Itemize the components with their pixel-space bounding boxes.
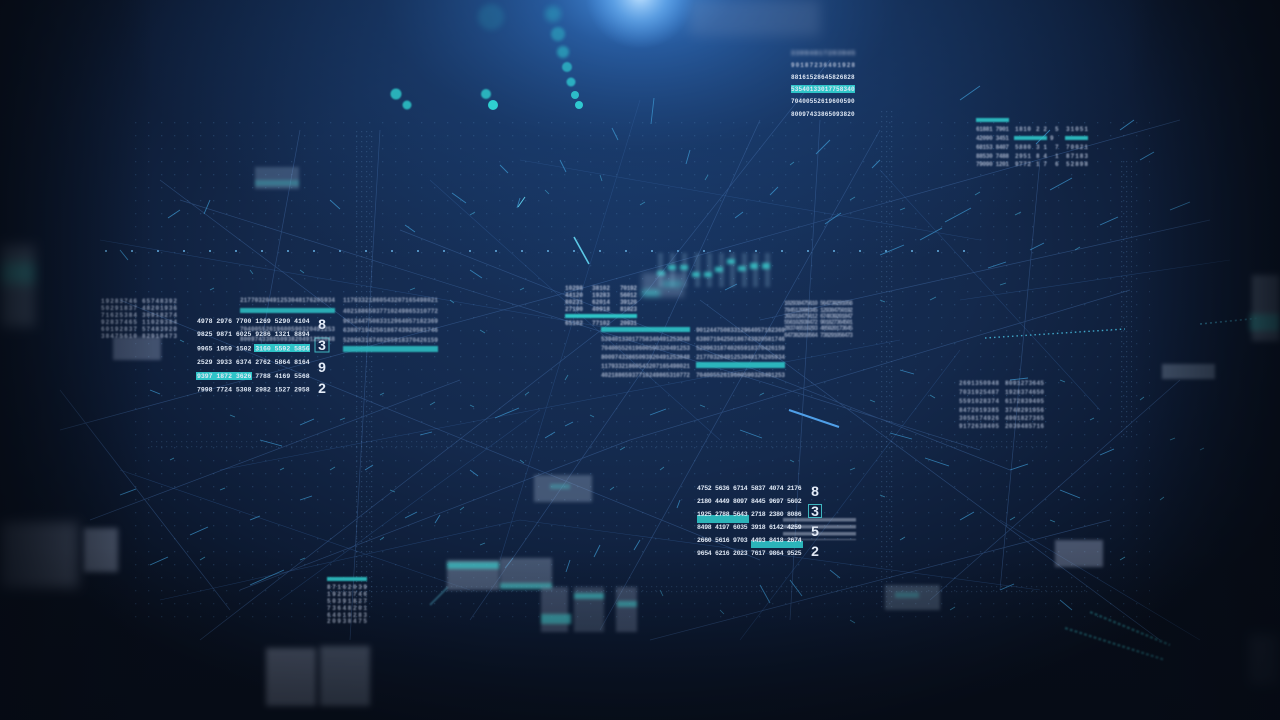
data block: lower list: 73648201 <box>327 605 367 612</box>
blurred patch near chart <box>642 273 684 297</box>
data block: small center columns: 39120 <box>620 299 637 306</box>
data lines: left upper block: 63807194250186743920581746 <box>343 327 438 334</box>
data lines: left upper block: 21770320491253048176205934 <box>240 297 335 304</box>
data block: center right blurred columns: 129384750192 <box>820 307 853 314</box>
teal light dots top <box>390 88 498 110</box>
blurred panel: right edge teal <box>1250 275 1280 341</box>
large digits <box>315 316 329 396</box>
dashed teal beams on right <box>985 318 1260 660</box>
number rows: 9654 6216 2023 7617 9864 9525 <box>697 550 802 557</box>
data block: left blurred columns: 38475610 <box>101 333 137 340</box>
data block: right middle blurred: 6172839405 <box>1005 398 1044 405</box>
data lines: left upper block: 52096318740265918370426159 <box>343 337 438 344</box>
data table: top right grid: 31051 <box>1066 126 1088 133</box>
number rows: 1925 2788 5643 2718 2380 8086 <box>697 511 802 518</box>
tiny particle dashes <box>170 162 1204 623</box>
dot grid field <box>130 110 1150 620</box>
highlight bars <box>697 515 803 548</box>
data block: small center columns: 19283 <box>592 292 610 299</box>
data table: top right grid: 9 <box>1050 135 1054 142</box>
data block: center lines: 52096318740265918370426159 <box>696 345 785 352</box>
large digits: 2 <box>318 380 326 396</box>
data block: left blurred columns: 82910473 <box>142 333 177 340</box>
data table: main left numbers <box>196 316 329 396</box>
data block: center right blurred columns: 784512098345 <box>784 307 818 314</box>
data block: left blurred columns: 57483920 <box>142 326 177 333</box>
large digits: 3 <box>811 503 819 519</box>
data block: center lines: 11793321860543207165498021 <box>601 363 690 370</box>
data table: top right grid: 84 <box>1036 153 1047 160</box>
data table: top right grid: 52898 <box>1066 161 1088 168</box>
number rows: 2180 4449 8097 8445 9697 5602 <box>697 498 802 505</box>
data block: top right list: 70400552619600590 <box>791 98 855 105</box>
large digits: 8 <box>811 483 819 499</box>
data block: small center columns: 62014 <box>592 299 610 306</box>
data table: top right grid: 5880 <box>1015 144 1031 151</box>
data block: small center columns: 56012 <box>620 292 637 299</box>
data block: small center columns: 44120 <box>565 292 583 299</box>
data table: top right grid: 6 <box>1055 161 1059 168</box>
data block: right middle blurred: 4901827365 <box>1005 415 1044 422</box>
blurred panel: bottom foreground table <box>266 646 370 706</box>
data block: top right list: 90187236401928 <box>791 62 855 69</box>
data block: center right blurred columns: 647382910564 <box>784 332 818 339</box>
large digits <box>808 483 822 559</box>
data block: center lines: 80097433865093820491253048 <box>601 354 690 361</box>
data block: center right blurred columns <box>784 300 853 339</box>
data block: right middle blurred: 8091273645 <box>1005 380 1044 387</box>
data block: small center columns: 10298 <box>565 285 583 292</box>
falling dotted light trail <box>478 4 583 109</box>
data block: center lines: 21770320491253048176205934 <box>696 354 785 361</box>
blurred panel: far left foreground <box>0 522 78 588</box>
data block: center right blurred columns: 901827364501 <box>820 319 853 326</box>
data block: center right blurred columns: 283746510293 <box>784 325 818 332</box>
data block: top right list <box>791 50 855 118</box>
scattered light dashes <box>120 86 1190 610</box>
blurred panel: upper left <box>255 167 299 189</box>
data block: center lines: 53940133017758340491253048 <box>601 336 690 343</box>
data block: lower list: 19283746 <box>327 591 367 598</box>
data block: right middle blurred: 7031925487 <box>959 389 999 396</box>
large digits: 9 <box>318 359 326 375</box>
blurred panel: bottom right edge <box>1250 635 1280 685</box>
large digits: 2 <box>811 543 819 559</box>
data block: right middle blurred <box>959 380 1044 430</box>
data lines: left upper block: 80097433865093820491253048 <box>240 336 335 343</box>
number rows: 2529 3933 6374 2762 5864 8164 <box>197 359 310 366</box>
data table: top right grid: 68153 8407 <box>976 144 1009 151</box>
data block: right middle blurred: 8472019385 <box>959 407 999 414</box>
data block: small center columns: 80231 <box>565 299 583 306</box>
fine network lines <box>100 100 1230 640</box>
data block: center lines: 90124475083312964057182369 <box>696 327 785 334</box>
data block: small center columns: 65102 <box>565 320 583 327</box>
blurred panel: lower columns <box>541 587 637 632</box>
data block: small center columns: 38102 <box>592 285 610 292</box>
data block: center right blurred columns: 485920173645 <box>820 325 853 332</box>
data table: top right grid: 42090 3451 <box>976 135 1009 142</box>
data table: top right grid: 9772 <box>1015 161 1031 168</box>
data block: center lines: 70400552619600590320491253 <box>601 345 690 352</box>
data block: left blurred columns: 71625384 <box>101 312 137 319</box>
data table: top right grid <box>976 118 1088 168</box>
data table: top right grid: 31 <box>1036 144 1047 151</box>
long network lines <box>60 60 1210 640</box>
data lines: left upper block: 11793321860543207165498021 <box>343 297 438 304</box>
data table: top right grid: 17 <box>1036 161 1047 168</box>
data block: center right blurred columns: 564738291056 <box>820 300 853 307</box>
data block: top right list: 80097433865093820 <box>791 111 855 118</box>
data lines: left upper block: 70400552619600590320491253 <box>240 326 335 333</box>
number rows <box>197 318 310 394</box>
number rows: 2660 5616 9703 4493 8418 2674 <box>697 537 802 544</box>
large digits: 8 <box>318 316 326 332</box>
data block: right middle blurred: 3058174926 <box>959 415 999 422</box>
blurred panel: left edge teal <box>0 245 34 327</box>
data block: left blurred columns: 92837465 <box>101 319 137 326</box>
data block: center right blurred columns: 674839201847 <box>820 313 853 320</box>
number rows: 4752 5636 6714 5837 4074 2176 <box>697 485 802 492</box>
data table: top right grid: 1810 <box>1015 126 1031 133</box>
data lines: left upper block <box>240 297 438 352</box>
data block: small center columns: 77102 <box>592 320 610 327</box>
data block: small center columns: 70192 <box>620 285 637 292</box>
data block: left blurred columns: 30918274 <box>142 312 177 319</box>
data table: top right grid: 70021 <box>1066 144 1088 151</box>
data table: top right grid: 2951 <box>1015 153 1031 160</box>
blurred panel: lower center <box>534 475 592 502</box>
blurred panel: left chart patch <box>113 337 161 360</box>
data block: top right list: 33094817203945 <box>791 50 855 57</box>
data block: left blurred columns <box>101 298 177 340</box>
data lines: left upper block: 40218865937710249865310772 <box>343 308 438 315</box>
blurred panel: behind lower table <box>783 518 856 540</box>
data block: right middle blurred: 9172638405 <box>959 423 999 430</box>
large digits: 3 <box>318 337 326 353</box>
blurred panel: lower right <box>1055 540 1103 567</box>
data block: left blurred columns: 48201936 <box>142 305 177 312</box>
blurred panel: left foreground columns <box>84 528 118 572</box>
data table: top right grid: 22 <box>1036 126 1047 133</box>
bright light source <box>585 0 695 49</box>
data table: top right grid: 61881 7901 <box>976 126 1009 133</box>
data block: right middle blurred: 1928374650 <box>1005 389 1044 396</box>
number rows: 9397 1872 3626 7788 4169 5568 <box>197 373 310 380</box>
data block: left blurred columns: 60192837 <box>101 326 137 333</box>
data table: top right grid: 88530 7488 <box>976 153 1009 160</box>
data block: lower list: 87162039 <box>327 584 367 591</box>
chart: vertical teal bars cluster <box>657 253 770 287</box>
data block: left blurred columns: 19283746 <box>101 298 137 305</box>
data block: small center columns <box>565 285 637 327</box>
blurred panel: right middle <box>1162 364 1215 379</box>
data table: top right grid: 5 <box>1055 126 1059 133</box>
data table: top right grid: 87183 <box>1066 153 1088 160</box>
data block: small center columns: 20931 <box>620 320 637 327</box>
data block: center right blurred columns: 556102938472 <box>784 319 818 326</box>
data block: lower list: 20938475 <box>327 618 367 625</box>
data block: top right list: 88161528645826828 <box>791 74 855 81</box>
data block: right middle blurred: 2039485716 <box>1005 423 1044 430</box>
number rows: 9825 9871 6025 9286 1321 8894 <box>197 331 310 338</box>
data lines: left upper block: 90124475083312964057182369 <box>343 318 438 325</box>
number rows <box>697 485 802 557</box>
data block: center lines: 70400552619600590320491253 <box>696 372 785 379</box>
left column highlights <box>196 344 310 380</box>
horizontal dotted beam <box>105 250 965 252</box>
data block: small center columns: 81023 <box>620 306 637 313</box>
data block: center right blurred columns: 102938475610 <box>784 300 818 307</box>
data block: left blurred columns: 11029384 <box>142 319 177 326</box>
data block: center right blurred columns: 738291056473 <box>820 332 853 339</box>
data table: top right grid: 7 <box>1055 144 1059 151</box>
data block: center right blurred columns: 392018475612 <box>784 313 818 320</box>
blurred panel: top <box>690 0 820 36</box>
data table: top right grid: 79090 1201 <box>976 161 1009 168</box>
data block: center lines <box>601 327 785 379</box>
data block: small center columns: 27190 <box>565 306 583 313</box>
data block: lower list <box>327 577 367 625</box>
data table: top right grid: 1 <box>1055 153 1059 160</box>
bright foreground streaks <box>430 197 839 605</box>
large digits: 5 <box>811 523 819 539</box>
number rows: 4978 2976 7700 1269 5290 4104 <box>197 318 310 325</box>
number rows: 9965 1959 1502 3160 5592 5856 <box>197 346 310 352</box>
blurred panel: lower right teal <box>885 585 940 610</box>
data block: small center columns: 40918 <box>592 306 610 313</box>
number rows: 7998 7724 5308 2982 1527 2958 <box>197 386 310 394</box>
data table: lower right numbers <box>697 483 822 559</box>
data block: lower list: 50391827 <box>327 598 367 605</box>
data block: right middle blurred: 3748291056 <box>1005 407 1044 414</box>
data block: top right list: 53540133017758340 <box>791 86 855 93</box>
data block: lower list: 64019283 <box>327 612 367 619</box>
data block: right middle blurred: 2691350948 <box>959 380 999 387</box>
spotlight glow at top <box>0 0 1280 340</box>
data block: left blurred columns: 65748392 <box>142 298 177 305</box>
data block: center lines: 63807194250186743920581746 <box>696 336 785 343</box>
blurred panel: lower wide table <box>447 558 552 590</box>
data block: right middle blurred: 5591028374 <box>959 398 999 405</box>
number rows: 8498 4197 6035 3918 6142 4259 <box>697 524 802 531</box>
data block: center lines: 40218865937710249865310772 <box>601 372 690 379</box>
data block: left blurred columns: 50291837 <box>101 305 137 312</box>
